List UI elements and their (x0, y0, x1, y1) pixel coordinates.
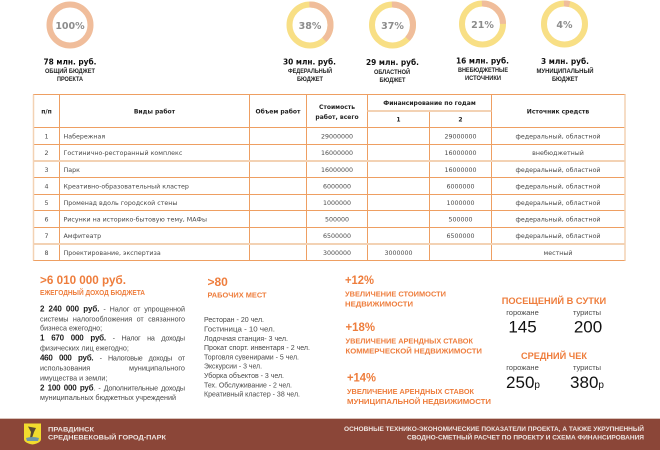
donut: regional budget 37%: БЮДЖЕТ (380, 78, 406, 84)
donut: federal budget 38%: БЮДЖЕТ (297, 77, 323, 83)
table row 8: 8 (44, 250, 49, 257)
list: jobs by object: Креативный кластер - 38 чел. (204, 391, 300, 399)
text block: income breakdown: муниципальных бюджетных учреждений (40, 393, 176, 402)
panel: average check: 250р (506, 373, 540, 392)
table row 6: Рисунки на историко-бытовую тему, МАФы (64, 216, 207, 224)
table row 5 (44, 199, 601, 207)
text block: income breakdown: бизнеса ежегодно; (40, 324, 102, 333)
table row 1: федеральный, областной (515, 133, 601, 141)
panel: commercial rent +18%: КОММЕРЧЕСКОЙ НЕДВИЖИМОСТИ (346, 347, 482, 356)
list: jobs by object: Тех. Обслуживание - 2 чел. (204, 381, 292, 389)
text block: income breakdown: физических лиц ежегодно; (40, 344, 129, 352)
table row 8: Проектирование, экспертиза (64, 250, 161, 257)
donut: federal budget 38% (283, 4, 336, 83)
text block: income breakdown: системы налогообложения от связанного (40, 314, 185, 323)
donut: municipal budget 4%: 4% (556, 20, 573, 31)
table: works and financing (34, 94, 625, 260)
table header: Стоимость (319, 104, 355, 111)
donut: federal budget 38%: 38% (299, 21, 322, 32)
text block: income breakdown: имущества и земли; (40, 374, 107, 382)
footer title: ПРАВДИНСК (48, 426, 95, 433)
table row 3: 3 (44, 167, 49, 174)
panel: average check: 380р (570, 373, 604, 392)
panel: visits per day: ПОСЕЩЕНИЙ В СУТКИ (502, 295, 606, 307)
table row 1: 29000000 (444, 134, 477, 141)
table row 1: Набережная (64, 133, 105, 141)
panel: commercial rent +18%: +18% (346, 322, 375, 334)
panel: visits per day: 145 (508, 318, 537, 337)
donut: off-budget sources 21%: 16 млн. руб. (456, 56, 509, 66)
table row 5: 1000000 (446, 200, 475, 207)
table row 5: Променад вдоль городской стены (64, 199, 177, 207)
donut: federal budget 38%: 30 млн. руб. (283, 56, 336, 66)
table row 4: 6000000 (323, 183, 351, 190)
table row 8 (44, 249, 572, 257)
panel: municipal rent +14% (347, 373, 491, 406)
table grid (34, 94, 625, 260)
table row 6: 500000 (448, 217, 473, 224)
donut: off-budget sources 21% (456, 4, 509, 82)
table row 4 (44, 182, 601, 190)
table row 6: 500000 (325, 217, 349, 224)
table row 3: федеральный, областной (515, 166, 601, 174)
table row 7: 7 (44, 233, 49, 240)
table header: Финансирование по годам (383, 100, 476, 107)
list: jobs by object: Гостиница - 10 чел. (204, 326, 275, 333)
table row 4: 6000000 (446, 183, 475, 190)
panel: commercial rent +18%: УВЕЛИЧЕНИЕ АРЕНДНЫХ СТАВОК (346, 337, 473, 346)
table row 3: Парк (64, 167, 80, 174)
text block: income breakdown: 2 100 000 руб. - Дополнительные доходы (40, 384, 185, 392)
table row 3: 16000000 (321, 167, 353, 174)
table header (41, 100, 589, 124)
footer bar (0, 418, 660, 450)
panel: visits per day: 200 (574, 318, 602, 337)
panel: average check: туристы (573, 363, 601, 372)
table row 7: федеральный, областной (515, 232, 601, 240)
donut: off-budget sources 21%: 21% (471, 20, 494, 31)
table row 5: 1000000 (323, 200, 351, 207)
footer description: ОСНОВНЫЕ ТЕХНИКО-ЭКОНОМИЧЕСКИЕ ПОКАЗАТЕЛИ ПРОЕКТА, А ТАКЖЕ УКРУПНЕННЫЙ (344, 424, 644, 433)
footer description (344, 424, 644, 442)
text block: income breakdown: 1 670 000 руб. - Налог на доходы (40, 334, 185, 342)
donut: off-budget sources 21%: ИСТОЧНИКИ (465, 76, 501, 82)
table row 2: 16000000 (321, 150, 353, 157)
table header: Источник средств (527, 108, 589, 116)
table row 7: 6500000 (323, 233, 351, 240)
table row 8: местный (544, 249, 572, 257)
panel: average check: СРЕДНИЙ ЧЕК (521, 350, 587, 362)
table row 1: 29000000 (321, 134, 353, 141)
table row 2: 16000000 (444, 150, 477, 157)
table header: 1 (396, 116, 401, 124)
donut: municipal budget 4% (536, 4, 594, 83)
list: jobs by object: Лодочная станция- 3 чел. (204, 336, 288, 343)
donut: municipal budget 4%: 3 млн. руб. (541, 56, 589, 66)
donut: regional budget 37%: ОБЛАСТНОЙ (374, 68, 410, 76)
table row 6: 6 (44, 217, 49, 224)
donut: regional budget 37%: 29 млн. руб. (366, 57, 419, 67)
list: jobs by object: Уборка объектов - 3 чел. (204, 372, 284, 380)
table row 7: 6500000 (446, 233, 475, 240)
table row 3: 16000000 (444, 167, 477, 174)
panel: average check (506, 350, 604, 392)
donut: municipal budget 4%: МУНИЦИПАЛЬНЫЙ (536, 67, 594, 75)
panel: real estate value +12%: УВЕЛИЧЕНИЕ СТОИМОСТИ (345, 289, 446, 298)
donut: total budget 100%: ОБЩИЙ БЮДЖЕТ (45, 67, 95, 75)
table header: п/п (41, 108, 52, 116)
donut: total budget 100% (44, 4, 96, 83)
table row 7: Амфитеатр (64, 233, 101, 240)
text block: income breakdown: использования (40, 364, 90, 372)
table row 2: внебюджетный (532, 149, 584, 157)
panel: real estate value +12% (345, 275, 446, 308)
subheading: income: ЕЖЕГОДНЫЙ ДОХОД БЮДЖЕТА (40, 288, 145, 297)
panel: municipal rent +14%: МУНИЦИПАЛЬНОЙ НЕДВИЖИМОСТИ (347, 397, 491, 406)
panel: visits per day (502, 295, 606, 337)
subheading: jobs: РАБОЧИХ МЕСТ (208, 291, 267, 300)
table row 2: Гостинично-ресторанный комплекс (64, 149, 183, 157)
table row 5: 5 (44, 200, 49, 207)
table row 2 (44, 149, 584, 157)
panel: annual budget income (40, 273, 186, 402)
icon: city coat of arms (24, 424, 41, 444)
table row 5: федеральный, областной (515, 199, 601, 207)
list: jobs by object (204, 317, 310, 399)
table header: Объем работ (256, 108, 301, 116)
heading: income figure: >6 010 000 руб. (40, 273, 126, 287)
table row 3 (44, 166, 601, 174)
panel: real estate value +12%: +12% (345, 275, 374, 287)
table header: работ, всего (315, 114, 359, 121)
text block: income breakdown: 2 240 000 руб. - Налог от упрощенной (40, 304, 185, 314)
donut: total budget 100%: ПРОЕКТА (57, 77, 84, 83)
table row 1: 1 (44, 134, 49, 141)
table row 4: Креативно-образовательный кластер (64, 182, 189, 190)
table row 6 (44, 216, 601, 224)
donut: regional budget 37%: 37% (381, 21, 404, 32)
panel: visits per day: горожане (506, 308, 539, 317)
list: jobs by object: Экскурсии - 3 чел. (204, 364, 262, 371)
panel: jobs (204, 275, 310, 399)
panel: real estate value +12%: НЕДВИЖИМОСТИ (345, 299, 413, 308)
table row 6: федеральный, областной (515, 216, 601, 224)
footer title: СРЕДНЕВЕКОВЫЙ ГОРОД-ПАРК (48, 432, 167, 442)
donut: total budget 100%: 78 млн. руб. (44, 56, 96, 66)
panel: municipal rent +14%: +14% (347, 373, 376, 385)
table row 1 (44, 133, 601, 141)
panel: municipal rent +14%: УВЕЛИЧЕНИЕ АРЕНДНЫХ СТАВОК (347, 387, 474, 396)
list: jobs by object: Прокат спорт. инвентаря - 2 чел. (204, 345, 310, 352)
list: jobs by object: Торговля сувенирами - 5 чел. (204, 354, 299, 361)
heading: jobs figure: >80 (208, 275, 228, 289)
table row 8: 3000000 (323, 250, 351, 257)
table row 2: 2 (44, 150, 49, 157)
donut: total budget 100%: 100% (55, 21, 85, 32)
text block: income breakdown (40, 304, 186, 402)
donut: off-budget sources 21%: ВНЕБЮДЖЕТНЫЕ (458, 68, 508, 74)
text block: income breakdown: муниципального (129, 364, 185, 372)
panel: average check: горожане (506, 363, 539, 372)
table header: Виды работ (134, 108, 176, 116)
list: jobs by object: Ресторан - 20 чел. (204, 317, 264, 324)
table row 8: 3000000 (384, 250, 413, 257)
panel: commercial rent +18% (346, 322, 482, 356)
table header: 2 (458, 116, 463, 124)
donut: regional budget 37% (366, 4, 419, 84)
donut: municipal budget 4%: БЮДЖЕТ (552, 77, 578, 83)
text block: income breakdown: 460 000 руб. - Налоговые доходы от (40, 354, 186, 363)
donut: federal budget 38%: ФЕДЕРАЛЬНЫЙ (288, 67, 332, 75)
table row 7 (44, 232, 601, 240)
panel: visits per day: туристы (573, 308, 601, 317)
table row 4: 4 (44, 183, 49, 190)
footer title (48, 426, 167, 442)
footer description: СВОДНО-СМЕТНЫЙ РАСЧЕТ ПО ПРОЕКТУ И СХЕМА ФИНАНСИРОВАНИЯ (407, 432, 644, 442)
table row 4: федеральный, областной (515, 182, 601, 190)
